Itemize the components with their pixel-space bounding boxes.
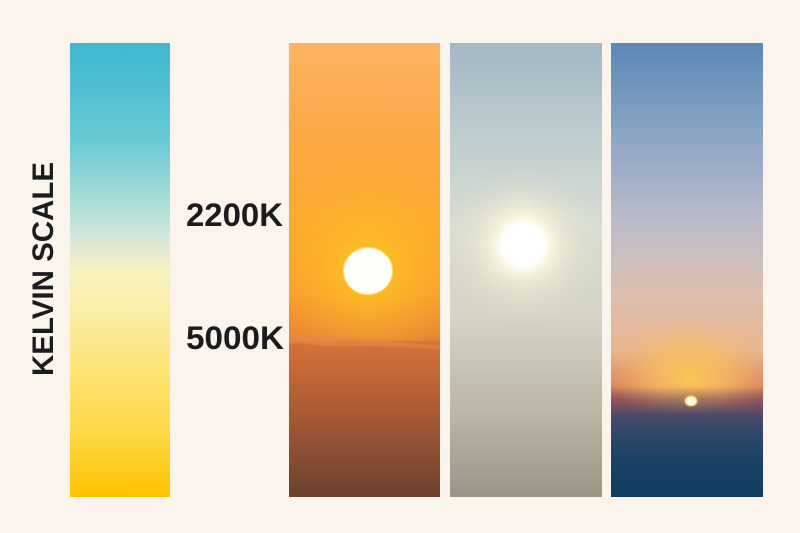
dark lower horizon <box>611 386 763 497</box>
setting sun <box>685 396 697 406</box>
gradient color temperature scale bar <box>70 43 170 497</box>
cloud band on horizon <box>289 334 440 349</box>
sun rays <box>468 190 578 282</box>
sun disc <box>344 248 392 294</box>
label: 5000K: 5000K <box>186 320 284 356</box>
axis title: Kelvin scale: KELVIN SCALE <box>27 162 60 376</box>
panel: blue dusk sky <box>611 43 763 497</box>
panel: pale midday sky <box>450 43 602 497</box>
label: 2200K: 2200K <box>186 197 283 233</box>
panel: orange sunset sky <box>289 43 440 497</box>
